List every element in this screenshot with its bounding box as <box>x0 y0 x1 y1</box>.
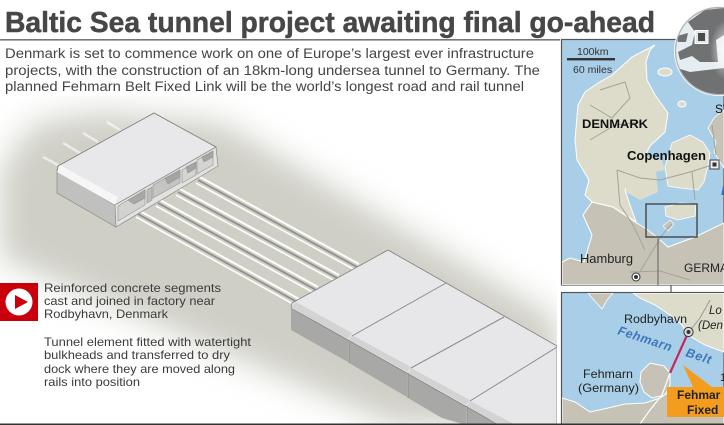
Lolland coast <box>633 293 724 352</box>
Fehmarn island in overview <box>663 220 674 231</box>
route road <box>688 300 710 333</box>
Germany land <box>562 202 724 285</box>
step text: cast and joined in factory near <box>44 294 215 308</box>
rails <box>136 177 359 305</box>
map: Denmark and northern Germany <box>562 40 724 285</box>
bevel <box>57 165 118 205</box>
callout <box>667 365 724 417</box>
Funen island <box>625 155 665 200</box>
bottom edge <box>0 424 724 425</box>
Africa landmass <box>677 68 724 94</box>
assembled tunnel segments <box>291 250 557 425</box>
intro text: planned Fehmarn Belt Fixed Link will be the world’s longest road and rail tunnel <box>5 79 524 95</box>
openings <box>118 151 213 221</box>
front face <box>115 147 218 227</box>
top face <box>57 113 216 205</box>
step text <box>44 281 252 389</box>
marker: Copenhagen <box>710 160 719 169</box>
scale bar: 100km <box>577 46 609 58</box>
label: Belt: Belt <box>684 346 714 367</box>
rails behind first segment <box>43 122 120 165</box>
icon: red play marker <box>0 283 38 321</box>
illustration: tunnel construction <box>0 112 557 425</box>
side walls <box>291 308 348 362</box>
label: Fehmarn: Fehmarn <box>616 324 674 354</box>
intro text: Denmark is set to commence work on one of Europe’s largest ever infrastructure <box>5 46 534 62</box>
step text: bulkheads and transferred to dry <box>44 348 230 362</box>
step text: Tunnel element fitted with watertight <box>44 335 252 349</box>
intro text <box>5 46 540 95</box>
leader line <box>657 237 659 285</box>
German mainland <box>562 390 724 424</box>
Lolland island <box>665 203 696 220</box>
step text: dock where they are moved along <box>44 362 235 376</box>
marker: Hamburg <box>632 273 640 281</box>
title: Baltic Sea tunnel project awaiting final go-ahead <box>5 7 655 39</box>
small islands <box>658 68 672 76</box>
Fehmarn island <box>640 363 670 398</box>
marker: Rodbyhavn <box>684 327 693 337</box>
callout: Fixed <box>687 403 718 417</box>
connector between maps <box>670 285 672 292</box>
Europe landmass <box>678 8 724 62</box>
locator square <box>695 30 708 44</box>
Zealand island <box>665 135 710 190</box>
intro text: projects, with the construction of an 18km-long undersea tunnel to Germany. The <box>5 63 540 79</box>
seabed ground shading <box>0 112 557 425</box>
label: Fehmarn island: Fehmarn <box>583 367 633 381</box>
label: DENMARK: DENMARK <box>582 119 649 131</box>
tunnel route line <box>670 333 688 373</box>
segment joints <box>349 283 557 424</box>
side wall <box>57 170 116 227</box>
label: Hamburg: Hamburg <box>580 252 633 266</box>
label: Denmark: (Den <box>698 320 723 332</box>
globe glare <box>710 20 724 80</box>
map: Fehmarn Belt detail <box>562 292 724 424</box>
Jutland land <box>575 45 668 222</box>
top surface <box>291 250 557 425</box>
title rule <box>0 39 560 41</box>
step text: rails into position <box>44 375 140 389</box>
callout: Fehmar <box>677 388 721 402</box>
bevel strip <box>291 302 352 339</box>
Sweden land <box>708 110 724 168</box>
label: Germany: (Germany) <box>578 381 639 395</box>
British Isles <box>677 33 688 42</box>
step text: Rodbyhavn, Denmark <box>44 307 169 321</box>
first tunnel segment, open end <box>57 113 218 227</box>
locator box <box>646 204 697 237</box>
globe locator <box>674 6 724 96</box>
roads <box>590 82 716 280</box>
small top-left land <box>588 293 613 309</box>
label: Rodbyhavn: Rodbyhavn <box>624 314 687 326</box>
step text: Reinforced concrete segments <box>44 281 221 295</box>
scale bar: 60 miles <box>573 64 612 76</box>
scale bar <box>567 48 615 73</box>
label: Copenhagen: Copenhagen <box>627 148 706 163</box>
label: Lolland: Lo <box>709 305 722 317</box>
